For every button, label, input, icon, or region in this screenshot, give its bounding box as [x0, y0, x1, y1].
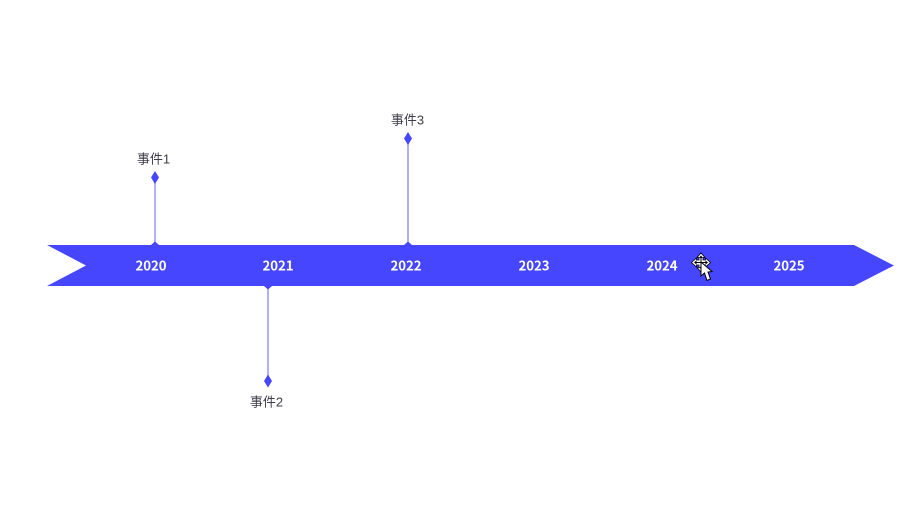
- event 3 stem: [407, 139, 409, 245]
- year 2020: 2020: [135, 256, 167, 274]
- year 2022: 2022: [390, 256, 422, 274]
- year 2025: 2025: [773, 256, 805, 274]
- event 2 base dot: [264, 286, 272, 290]
- event 2 diamond: [264, 374, 272, 388]
- year labels: [135, 256, 805, 274]
- year 2021: 2021: [262, 256, 294, 274]
- year 2023: 2023: [518, 256, 550, 274]
- event 3 marker: [391, 112, 424, 245]
- event 1 label: 事件1: [137, 152, 170, 166]
- event 1 marker: [137, 152, 170, 245]
- event 2 marker: [250, 286, 283, 410]
- event 3 diamond: [404, 132, 412, 145]
- event 3 base dot: [404, 242, 412, 245]
- timeline arrow band: [47, 245, 894, 286]
- event 3 label: 事件3: [391, 112, 424, 128]
- event 1 diamond: [151, 171, 159, 184]
- pointer arrow: [701, 262, 712, 280]
- event 2 stem: [267, 286, 269, 381]
- event 2 label: 事件2: [250, 394, 283, 410]
- move arrows: [692, 253, 710, 272]
- year 2024: 2024: [646, 256, 678, 274]
- event 1 stem: [154, 178, 156, 245]
- event 1 base dot: [151, 242, 159, 245]
- icon: move cursor: [692, 253, 712, 280]
